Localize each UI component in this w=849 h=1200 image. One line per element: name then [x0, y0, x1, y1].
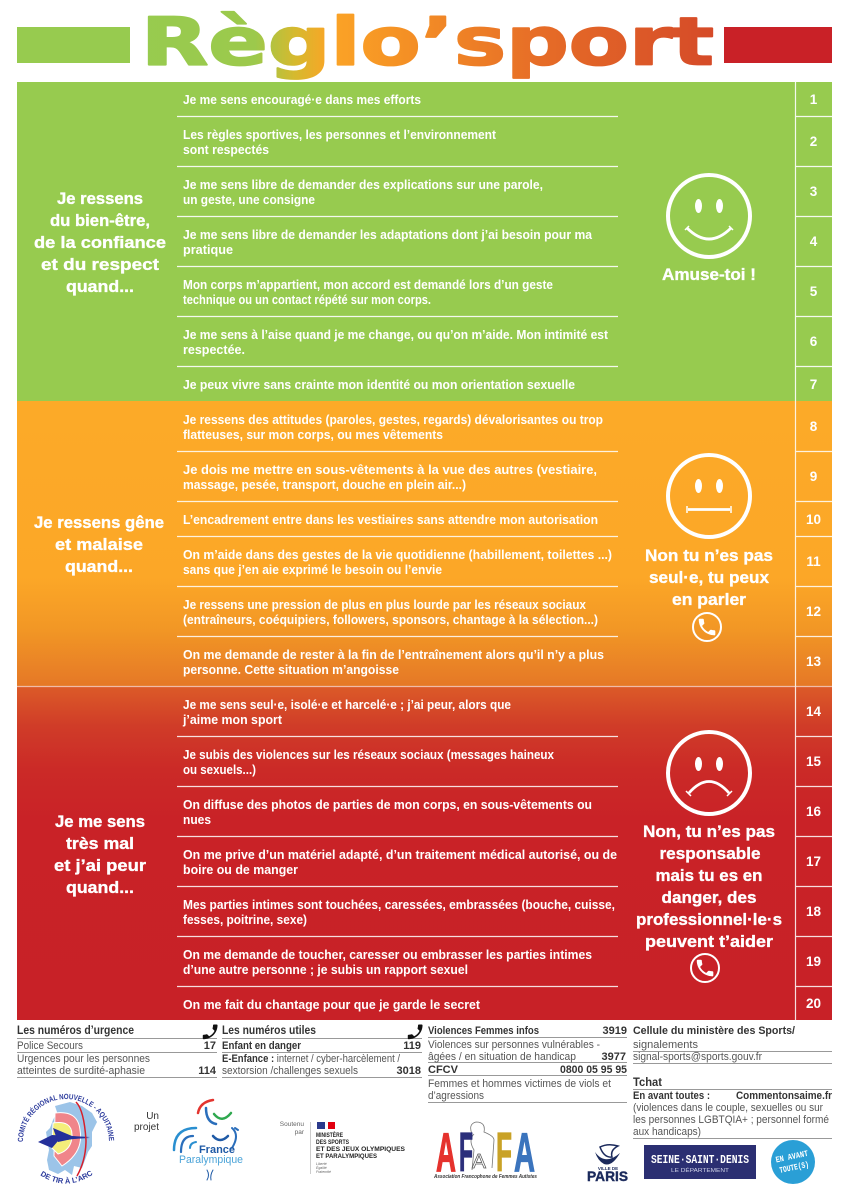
green title bar [17, 27, 130, 63]
footer: emergency numbers [17, 1023, 218, 1078]
logo: AFFA association: F [496, 1121, 512, 1183]
footer: useful numbers: E-Enfance : internet / cyber-harcèlement / [222, 1053, 401, 1065]
message: you are not alone: Non tu n’es pas [645, 546, 773, 565]
footer: ministry cell and chat [633, 1025, 833, 1138]
footer: other helplines: Violences sur personnes vulnérables - [428, 1039, 600, 1051]
footer: ministry cell and chat: Cellule du ministère des Sports/ [633, 1025, 795, 1037]
footer: ministry cell and chat: En avant toutes : [633, 1090, 710, 1102]
numbers 8 to 13: 12 [806, 604, 821, 619]
text: a project by: Un [146, 1111, 159, 1122]
numbers 14 to 20: 19 [806, 954, 821, 969]
statements 1 to 7: technique ou un contact répété sur mon corps. [183, 293, 431, 307]
footer: other helplines: CFCV [428, 1064, 459, 1076]
logo: Seine-Saint-Denis: SEINE·SAINT·DENIS [651, 1153, 749, 1167]
logo: ministry of sports: ET DES JEUX OLYMPIQUES [316, 1146, 405, 1153]
statements 1 to 7: Je me sens encouragé·e dans mes efforts [183, 93, 421, 107]
logo: Ville de Paris [587, 1145, 628, 1184]
statements 1 to 7: Je peux vivre sans crainte mon identité ou mon orientation sexuelle [183, 378, 575, 392]
statements 1 to 7 [183, 93, 609, 392]
footer: other helplines: Femmes et hommes victimes de viols et [428, 1078, 611, 1090]
footer: useful numbers: Les numéros utiles [222, 1023, 316, 1037]
heading: well-being [34, 189, 166, 296]
message: not responsible: professionnel·le·s [636, 910, 782, 929]
logo: AFFA association: Association Francophone de Femmes Autistes [433, 1174, 537, 1180]
logo: France Paralympique [174, 1100, 243, 1180]
numbers 1 to 7: 4 [810, 234, 818, 249]
statements 14 to 20: Je subis des violences sur les réseaux sociaux (messages haineux [183, 748, 554, 762]
icon: sad face [668, 732, 750, 814]
statements 1 to 7: sont respectés [183, 143, 269, 157]
statements 1 to 7: Mon corps m’appartient, mon accord est demandé lors d’un geste [183, 278, 553, 292]
statements 14 to 20: d’une autre personne ; je subis un rapport sexuel [183, 963, 468, 977]
footer: emergency numbers: Les numéros d’urgence [17, 1023, 134, 1037]
footer: emergency numbers: 17 [204, 1040, 216, 1052]
logo: ministry of sports: MINISTÈRE [316, 1130, 343, 1139]
numbers 8 to 13 [806, 419, 821, 669]
numbers 14 to 20: 17 [806, 854, 821, 869]
logo: En avant toutes: TOUTE(S) [779, 1160, 810, 1176]
logo: ministry of sports: Liberté [316, 1162, 327, 1166]
logo: Ville de Paris: VILLE DE [598, 1166, 618, 1171]
icon: neutral face [668, 455, 750, 537]
heading: well-being: de la confiance [34, 233, 166, 252]
numbers 8 to 13: 11 [806, 554, 821, 569]
red title bar [724, 27, 832, 63]
statements 1 to 7: Je me sens libre de demander les adaptations dont j’ai besoin pour ma [183, 228, 593, 242]
numbers 14 to 20: 15 [806, 754, 821, 769]
logo: archery regional committee [18, 1094, 114, 1184]
footer: ministry cell and chat: les personnes LGBTQIA+ ; personnel formé [633, 1114, 829, 1126]
statements 14 to 20: boire ou de manger [183, 863, 298, 877]
numbers 1 to 7: 3 [810, 184, 818, 199]
statements 14 to 20: Je me sens seul·e, isolé·e et harcelé·e ; j’ai peur, alors que [183, 698, 511, 712]
statements 1 to 7: Je me sens à l’aise quand je me change, ou qu’on m’aide. Mon intimité est [183, 328, 609, 342]
heading: discomfort [34, 513, 164, 576]
panel: discomfort (orange) [17, 401, 832, 686]
heading: well-being: quand... [66, 277, 134, 296]
statements 8 to 13 [183, 413, 612, 677]
footer: emergency numbers: 114 [198, 1065, 217, 1077]
footer: ministry cell and chat: (violences dans le couple, sexuelles ou sur [633, 1102, 823, 1114]
numbers 8 to 13: 10 [806, 512, 821, 527]
numbers 14 to 20: 20 [806, 996, 821, 1011]
logo: AFFA association: F [459, 1121, 473, 1183]
statements 14 to 20: fesses, poitrine, sexe) [183, 913, 307, 927]
title banner [17, 4, 832, 80]
icon: phone in circle [691, 954, 719, 982]
numbers 8 to 13: 8 [810, 419, 818, 434]
statements 14 to 20: On me demande de toucher, caresser ou embrasser les parties intimes [183, 948, 592, 962]
logo: Ville de Paris: PARIS [587, 1168, 628, 1184]
icon: phone [203, 1024, 218, 1039]
numbers 14 to 20: 16 [806, 804, 821, 819]
numbers 14 to 20: 18 [806, 904, 821, 919]
statements 14 to 20: On me fait du chantage pour que je garde le secret [183, 998, 481, 1012]
logo: Seine-Saint-Denis: LE DÉPARTEMENT [671, 1167, 730, 1174]
numbers 1 to 7 [810, 92, 818, 392]
statements 14 to 20: Mes parties intimes sont touchées, caressées, embrassées (bouche, cuisse, [183, 898, 615, 912]
heading: danger: et j’ai peur [54, 856, 146, 875]
statements 14 to 20: On diffuse des photos de parties de mon corps, en sous-vêtements ou [183, 798, 592, 812]
statements 1 to 7: pratique [183, 243, 233, 257]
logo: En avant toutes: EN AVANT [775, 1149, 809, 1165]
message: not responsible: mais tu es en [656, 866, 762, 885]
logo: archery regional committee: DE TIR À L’ARC [40, 1170, 92, 1184]
statements 1 to 7: respectée. [183, 343, 245, 357]
statements 8 to 13: Je ressens des attitudes (paroles, gestes, regards) dévalorisantes ou trop [183, 413, 603, 427]
logo: France Paralympique: Paralympique [179, 1154, 243, 1166]
footer: ministry cell and chat: signal-sports@sports.gouv.fr [633, 1051, 762, 1063]
numbers 1 to 7: 7 [810, 377, 817, 392]
heading: danger: Je me sens [55, 812, 145, 831]
statements 8 to 13: On me demande de rester à la fin de l’entraînement alors qu’il n’y a plus [183, 648, 604, 662]
statements 8 to 13: massage, pesée, transport, douche en plein air...) [183, 478, 466, 492]
message: not responsible: danger, des [662, 888, 756, 907]
statements 8 to 13: L’encadrement entre dans les vestiaires sans attendre mon autorisation [183, 513, 598, 527]
heading: well-being: et du respect [41, 255, 159, 274]
footer: useful numbers: Enfant en danger [222, 1040, 302, 1052]
logo: ministry of sports [280, 1121, 405, 1174]
logo: archery regional committee: COMITÉ RÉGIONAL NOUVELLE - AQUITAINE [18, 1094, 114, 1142]
statements 8 to 13: Je ressens une pression de plus en plus lourde par les réseaux sociaux [183, 598, 586, 612]
footer: other helplines: d’agressions [428, 1090, 484, 1102]
text: a project by [134, 1111, 159, 1133]
statements 8 to 13: personne. Cette situation m’angoisse [183, 663, 399, 677]
statements 14 to 20 [182, 698, 617, 1012]
logo: France Paralympique: France [199, 1144, 235, 1156]
statements 8 to 13: flatteuses, sur mon corps, ou mes vêtements [183, 428, 443, 442]
statements 8 to 13: Je dois me mettre en sous-vêtements à la vue des autres (vestiaire, [183, 463, 597, 477]
numbers 14 to 20: 14 [806, 704, 821, 719]
panel: well-being (green) [17, 82, 832, 401]
footer: other helplines: Violences Femmes infos [428, 1025, 539, 1037]
logo: ministry of sports: Égalité [316, 1165, 327, 1170]
message: you are not alone: en parler [672, 590, 746, 609]
footer: other helplines: 0800 05 95 95 [560, 1064, 627, 1076]
footer: ministry cell and chat: Commentonsaime.fr [736, 1090, 833, 1102]
numbers 1 to 7: 1 [810, 92, 818, 107]
logo: ministry of sports: Soutenu [280, 1121, 304, 1128]
footer: other helplines: âgées / en situation de handicap [428, 1051, 576, 1063]
footer: ministry cell and chat: signalements [633, 1039, 698, 1051]
statements 1 to 7: Je me sens libre de demander des explications sur une parole, [183, 178, 543, 192]
logo: En avant toutes [771, 1140, 815, 1184]
heading: well-being: du bien-être, [50, 211, 150, 230]
message: have fun: Amuse-toi ! [662, 265, 756, 284]
heading: danger: quand... [66, 878, 134, 897]
numbers 14 to 20 [806, 704, 821, 1011]
logo: Seine-Saint-Denis [644, 1145, 756, 1179]
numbers 8 to 13: 13 [806, 654, 821, 669]
statements 14 to 20: ou sexuels...) [183, 763, 256, 777]
statements 1 to 7: Les règles sportives, les personnes et l’environnement [183, 128, 497, 142]
numbers 1 to 7: 5 [810, 284, 818, 299]
statements 14 to 20: On me prive d’un matériel adapté, d’un traitement médical autorisé, ou de [183, 848, 617, 862]
footer: ministry cell and chat: aux handicaps) [633, 1126, 701, 1138]
message: you are not alone: seul·e, tu peux [649, 568, 770, 587]
statements 14 to 20: j’aime mon sport [182, 713, 283, 727]
numbers 1 to 7: 6 [810, 334, 818, 349]
message: not responsible: Non, tu n’es pas [643, 822, 775, 841]
footer: other helplines [428, 1025, 627, 1102]
title: Règlo’sport [141, 4, 714, 80]
numbers 8 to 13: 9 [810, 469, 817, 484]
heading: danger [54, 812, 146, 897]
footer: useful numbers: 3018 [397, 1065, 421, 1077]
heading: discomfort: et malaise [55, 535, 143, 554]
logo: ministry of sports: Fraternité [316, 1170, 331, 1174]
logo: AFFA association: A [436, 1121, 456, 1183]
statements 14 to 20: nues [183, 813, 211, 827]
icon: phone [408, 1024, 423, 1039]
heading: discomfort: quand... [65, 557, 133, 576]
text: a project by: projet [134, 1122, 159, 1133]
footer: useful numbers: sextorsion /challenges sexuels [222, 1065, 358, 1077]
icon: phone in circle [693, 613, 721, 641]
numbers 1 to 7: 2 [810, 134, 817, 149]
icon: happy face [668, 175, 750, 257]
footer: emergency numbers: Urgences pour les personnes [17, 1053, 150, 1065]
footer: other helplines: 3977 [602, 1051, 626, 1063]
footer: emergency numbers: atteintes de surdité-aphasie [17, 1065, 145, 1077]
statements 8 to 13: sans que j’en aie exprimé le besoin ou l’envie [183, 563, 442, 577]
message: not responsible: responsable [660, 844, 760, 863]
logo: ministry of sports: par [295, 1129, 305, 1136]
logo: AFFA association: A [514, 1121, 535, 1183]
logo: ministry of sports: ET PARALYMPIQUES [316, 1153, 377, 1160]
footer: useful numbers [222, 1023, 423, 1078]
logo: AFFA association: A [472, 1151, 487, 1173]
logo: ministry of sports: DES SPORTS [316, 1139, 349, 1146]
statements 8 to 13: On m’aide dans des gestes de la vie quotidienne (habillement, toilettes ...) [183, 548, 612, 562]
statements 8 to 13: (entraîneurs, coéquipiers, followers, sponsors, chantage à la sélection...) [183, 613, 598, 627]
footer: other helplines: 3919 [603, 1025, 627, 1037]
footer: ministry cell and chat: Tchat [633, 1075, 662, 1089]
heading: well-being: Je ressens [57, 189, 143, 208]
heading: discomfort: Je ressens gêne [34, 513, 164, 532]
message: not responsible: peuvent t’aider [645, 932, 773, 951]
panel: danger (red) [17, 686, 832, 1020]
message: you are not alone [645, 546, 773, 609]
heading: danger: très mal [66, 834, 134, 853]
logo: AFFA association [433, 1121, 537, 1183]
statements 1 to 7: un geste, une consigne [183, 193, 315, 207]
message: not responsible [636, 822, 782, 951]
footer: useful numbers: 119 [403, 1040, 421, 1052]
footer: emergency numbers: Police Secours [17, 1040, 83, 1052]
